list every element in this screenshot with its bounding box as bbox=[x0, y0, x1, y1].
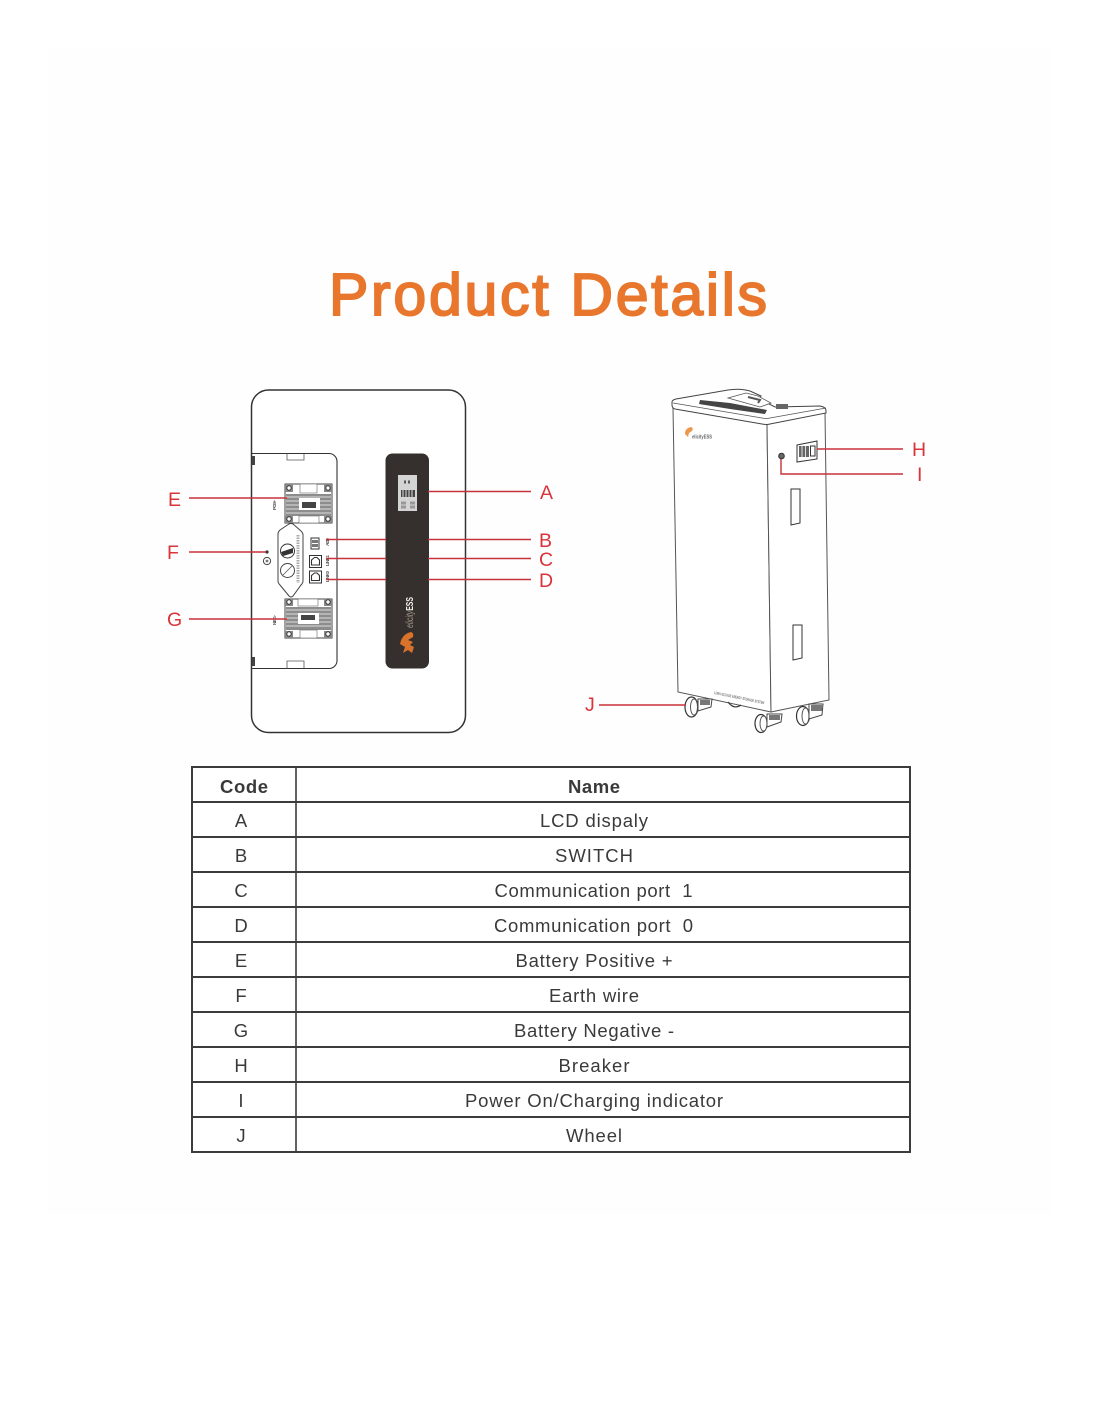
row I: I bbox=[238, 1090, 244, 1111]
switch and communication ports: LINK0 bbox=[325, 571, 330, 582]
brand logo bbox=[400, 597, 416, 653]
row G: G bbox=[234, 1020, 248, 1041]
callout letters: front view: D bbox=[539, 570, 553, 592]
front view diagram bbox=[252, 390, 466, 732]
brand logo: elicityESS bbox=[404, 597, 416, 628]
row F bbox=[235, 985, 639, 1006]
table header bbox=[220, 776, 620, 797]
positive terminal bbox=[285, 484, 332, 523]
row F: F bbox=[235, 985, 247, 1006]
callout letters: perspective view: I bbox=[917, 464, 922, 486]
row B: B bbox=[235, 845, 247, 866]
callout letters: front view: E bbox=[168, 489, 181, 511]
row G: Battery Negative - bbox=[514, 1020, 674, 1041]
row E: E bbox=[235, 950, 247, 971]
row D bbox=[234, 915, 693, 936]
callout lines: front view bbox=[189, 492, 531, 619]
row D: D bbox=[234, 915, 248, 936]
callout letters: perspective view: J bbox=[585, 694, 595, 716]
row C: C bbox=[234, 880, 248, 901]
row E: Battery Positive + bbox=[516, 950, 672, 971]
warning plate bbox=[278, 524, 303, 597]
specification table bbox=[192, 767, 910, 1152]
earth point bbox=[263, 550, 271, 565]
row A: A bbox=[235, 810, 248, 831]
callout letters: perspective view: H bbox=[912, 439, 926, 461]
callout letters: front view: B bbox=[539, 530, 552, 552]
callout letters: front view: G bbox=[167, 609, 182, 631]
small logo: elicityESS bbox=[692, 434, 713, 440]
row A bbox=[235, 810, 649, 831]
row J bbox=[236, 1125, 622, 1146]
small logo bbox=[685, 427, 713, 440]
switch and communication ports: LINK1 bbox=[325, 555, 330, 566]
row J: J bbox=[236, 1125, 246, 1146]
row H: Breaker bbox=[558, 1055, 630, 1076]
cabinet body bbox=[673, 408, 771, 712]
base text: LOW-VOLTAGE ENERGY STORAGE SYSTEM bbox=[714, 690, 765, 705]
row B: SWITCH bbox=[555, 845, 633, 866]
dark display panel bbox=[386, 454, 429, 668]
terminal panel: POS+ bbox=[272, 500, 277, 510]
cabinet top bbox=[672, 389, 826, 424]
LCD screen bbox=[398, 475, 417, 511]
terminal panel: NEG- bbox=[272, 614, 277, 625]
table header: Code bbox=[220, 776, 268, 797]
row J: Wheel bbox=[566, 1125, 622, 1146]
row G bbox=[234, 1020, 674, 1041]
table header: Name bbox=[568, 776, 620, 797]
breaker bbox=[797, 441, 817, 462]
callout lines: perspective view bbox=[599, 449, 903, 705]
row E bbox=[235, 950, 672, 971]
cabinet outline bbox=[252, 390, 466, 732]
switch and communication ports: ADD bbox=[325, 537, 330, 546]
wheels bbox=[685, 697, 823, 732]
row B bbox=[235, 845, 633, 866]
callout letters: perspective view bbox=[585, 439, 926, 716]
side handles bbox=[791, 489, 802, 660]
row C bbox=[234, 880, 692, 901]
terminal panel bbox=[252, 454, 337, 668]
indicator bbox=[779, 453, 784, 459]
callout letters: front view: C bbox=[539, 549, 553, 571]
row H bbox=[234, 1055, 630, 1076]
row I bbox=[238, 1090, 723, 1111]
table grid bbox=[192, 767, 910, 1152]
row H: H bbox=[234, 1055, 248, 1076]
switch and communication ports bbox=[310, 537, 330, 583]
callout letters: front view bbox=[167, 482, 553, 631]
callout letters: front view: A bbox=[540, 482, 553, 504]
perspective view diagram bbox=[672, 389, 829, 732]
callout letters: front view: F bbox=[167, 542, 179, 564]
row D: Communication port 0 bbox=[494, 915, 693, 936]
row I: Power On/Charging indicator bbox=[465, 1090, 723, 1111]
row C: Communication port 1 bbox=[494, 880, 692, 901]
row F: Earth wire bbox=[549, 985, 639, 1006]
row A: LCD dispaly bbox=[540, 810, 649, 831]
title: Product Details bbox=[329, 262, 767, 328]
negative terminal bbox=[285, 599, 332, 638]
